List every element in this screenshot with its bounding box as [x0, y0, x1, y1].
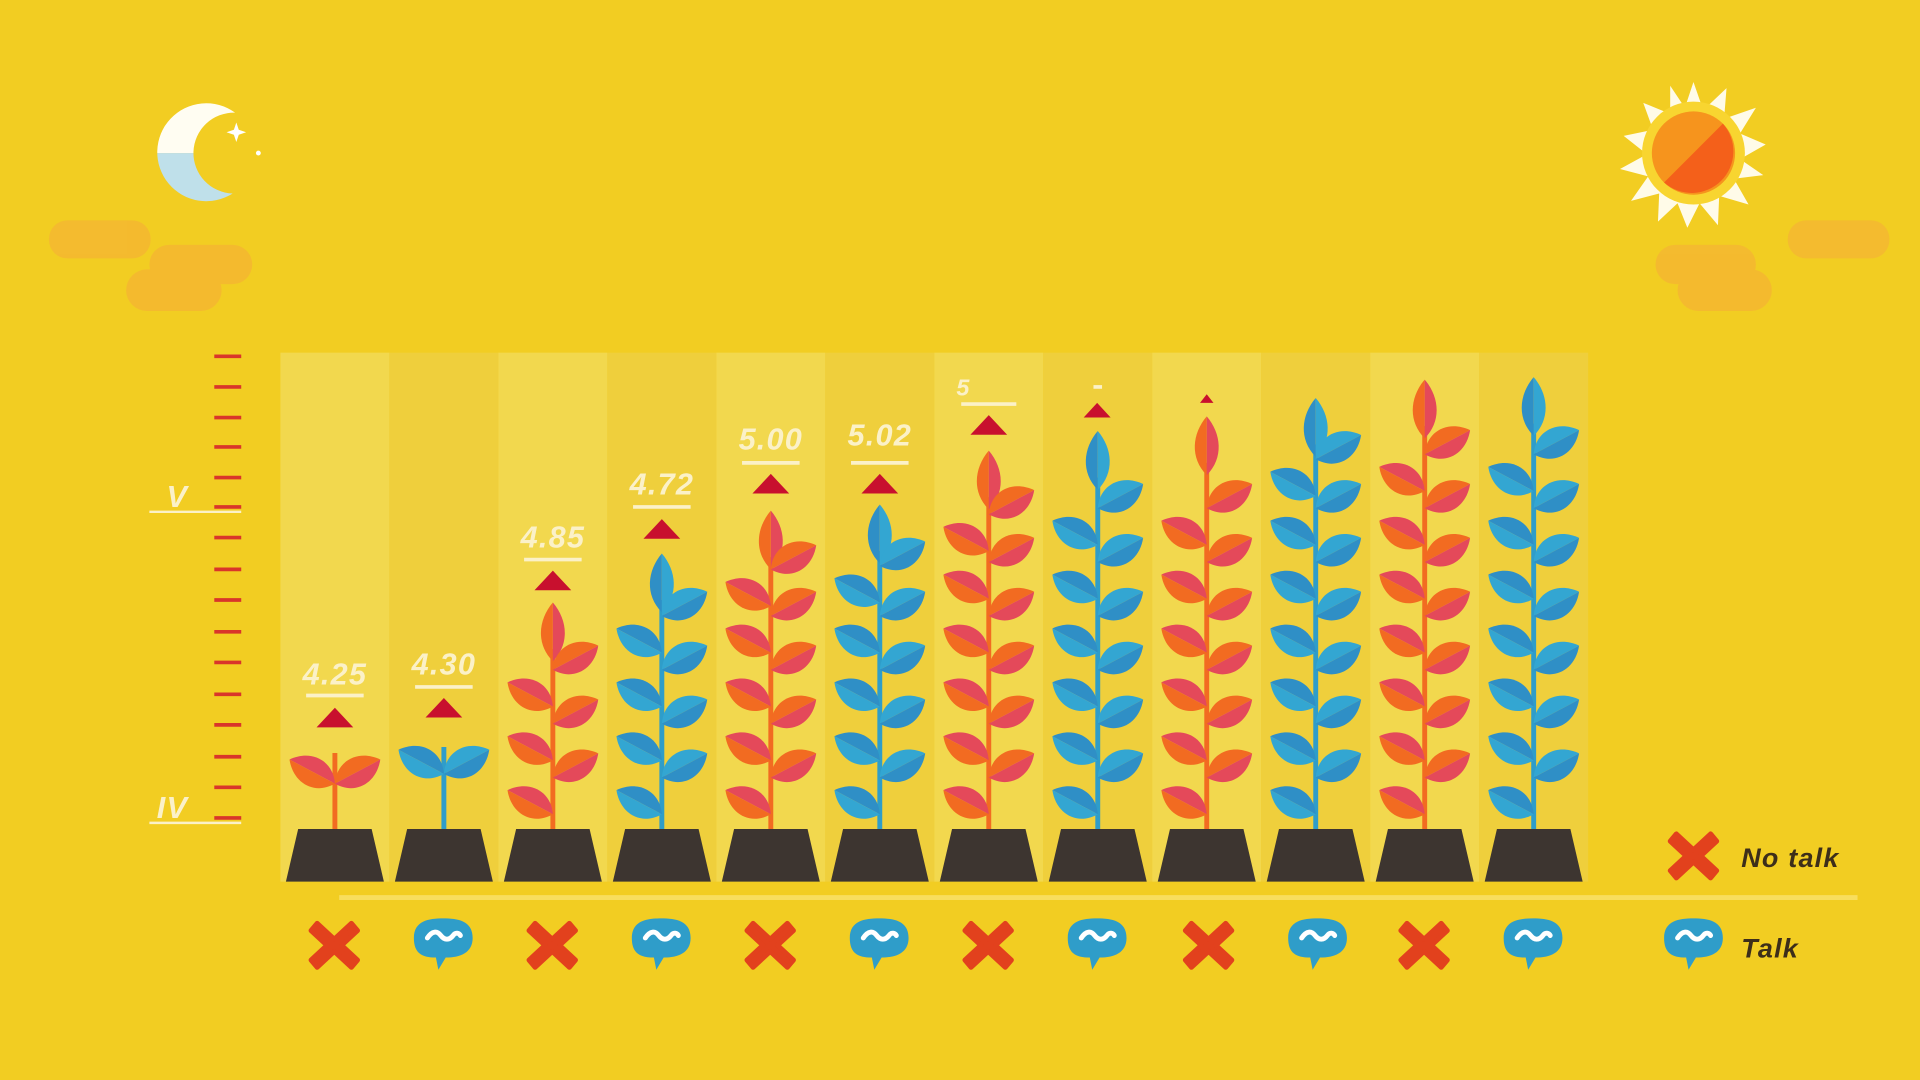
- value markers: 4.85: [520, 520, 585, 554]
- plant 7: [936, 451, 1041, 882]
- plant 9: [1154, 416, 1259, 882]
- plant 10: [1263, 398, 1368, 882]
- value markers: 4.30: [411, 648, 476, 682]
- legend: No talk: [1741, 843, 1840, 873]
- plant 4: [610, 553, 714, 882]
- ruler axis: [149, 356, 241, 825]
- plant 2: [392, 737, 496, 882]
- icons row: condition: [311, 918, 1562, 970]
- clouds right: [1656, 220, 1889, 311]
- plant 8: [1045, 431, 1150, 882]
- legend: Talk: [1741, 934, 1800, 964]
- plant 3: [501, 602, 605, 882]
- value markers: 5: [956, 375, 970, 401]
- ruler axis: IV: [157, 791, 189, 825]
- plant 1: [283, 747, 387, 882]
- icon: moon: [157, 103, 261, 202]
- icon: sun: [1620, 82, 1766, 228]
- value markers: [302, 375, 1213, 727]
- plant 12: [1481, 377, 1586, 882]
- value markers: 4.72: [629, 468, 694, 502]
- clouds left: [49, 220, 252, 311]
- panel: chart columns: [280, 353, 1588, 882]
- baseline: [339, 896, 1858, 900]
- value markers: 5.02: [848, 419, 912, 453]
- plant 6: [827, 504, 932, 882]
- legend: [1664, 834, 1840, 970]
- plant 5: [719, 511, 823, 882]
- value markers: 4.25: [302, 657, 367, 691]
- plant 11: [1372, 380, 1477, 882]
- value markers: 5.00: [739, 422, 803, 456]
- ruler axis: V: [167, 480, 190, 514]
